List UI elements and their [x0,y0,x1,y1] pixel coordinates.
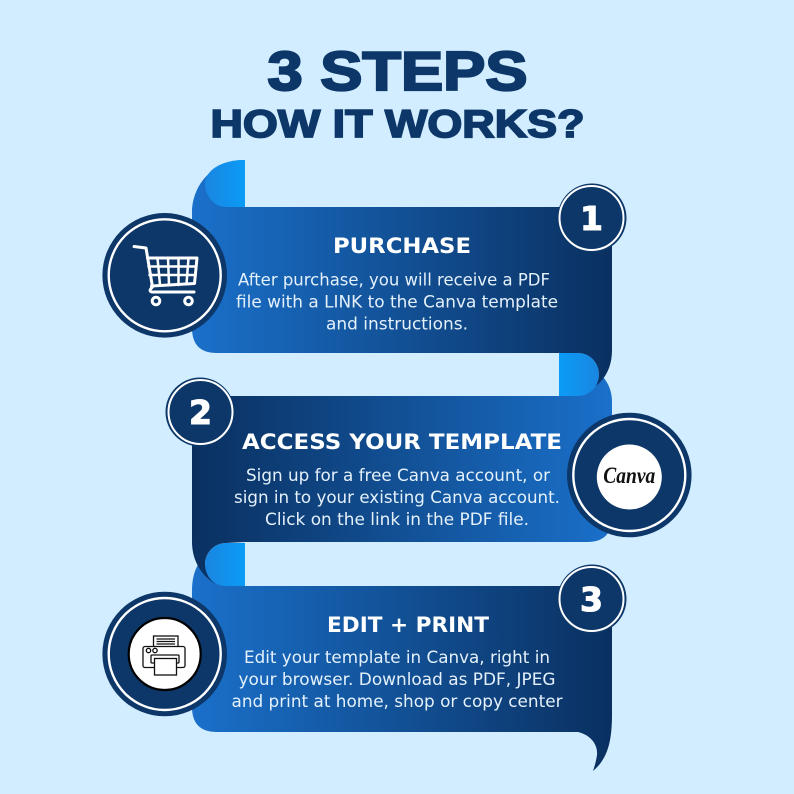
step 1 body [236,270,558,334]
band 3 [192,560,612,771]
icon: canva logo [567,413,692,537]
title: 3 STEPS [268,40,528,102]
band 1 [192,160,612,386]
badge: number 3 [558,564,626,634]
step 2 body: Sign up for a free Canva account, or [246,466,550,485]
step 2 heading: ACCESS YOUR TEMPLATE [242,430,562,455]
curl 1 [205,160,245,207]
step 2 body: Click on the link in the PDF file. [265,510,529,529]
step 1 body: file with a LINK to the Canva template [236,292,558,312]
step 3 heading: EDIT + PRINT [327,613,489,638]
badge: number 1 [558,184,626,252]
badge: number 2 [166,378,234,446]
badge: number 3: 3 [580,580,603,619]
panel: step 1 purchase [192,160,612,386]
step 1 body: and instructions. [326,314,468,334]
step 3 body: your browser. Download as PDF, JPEG [238,670,556,689]
step 3 body [232,648,563,711]
badge: number 2: 2 [189,393,212,432]
step 2 body [234,466,560,529]
step 1 heading: PURCHASE [333,234,471,259]
step 3 body: Edit your template in Canva, right in [244,648,550,667]
step 2 body: sign in to your existing Canva account. [234,488,560,507]
step 1 body: After purchase, you will receive a PDF [238,270,550,290]
icon: shopping cart [102,213,227,338]
title: HOW IT WORKS? [210,103,584,146]
icon: canva logo: Canva [603,463,655,488]
badge: number 1: 1 [580,199,603,238]
title [210,40,584,146]
panel: step 3 edit and print [192,543,612,771]
icon: printer [102,592,227,716]
panel: step 2 access your template [192,353,612,586]
curl 3 [205,543,245,586]
band 2 [192,374,612,586]
curl 2 [559,353,599,396]
step 3 body: and print at home, shop or copy center [232,692,563,711]
